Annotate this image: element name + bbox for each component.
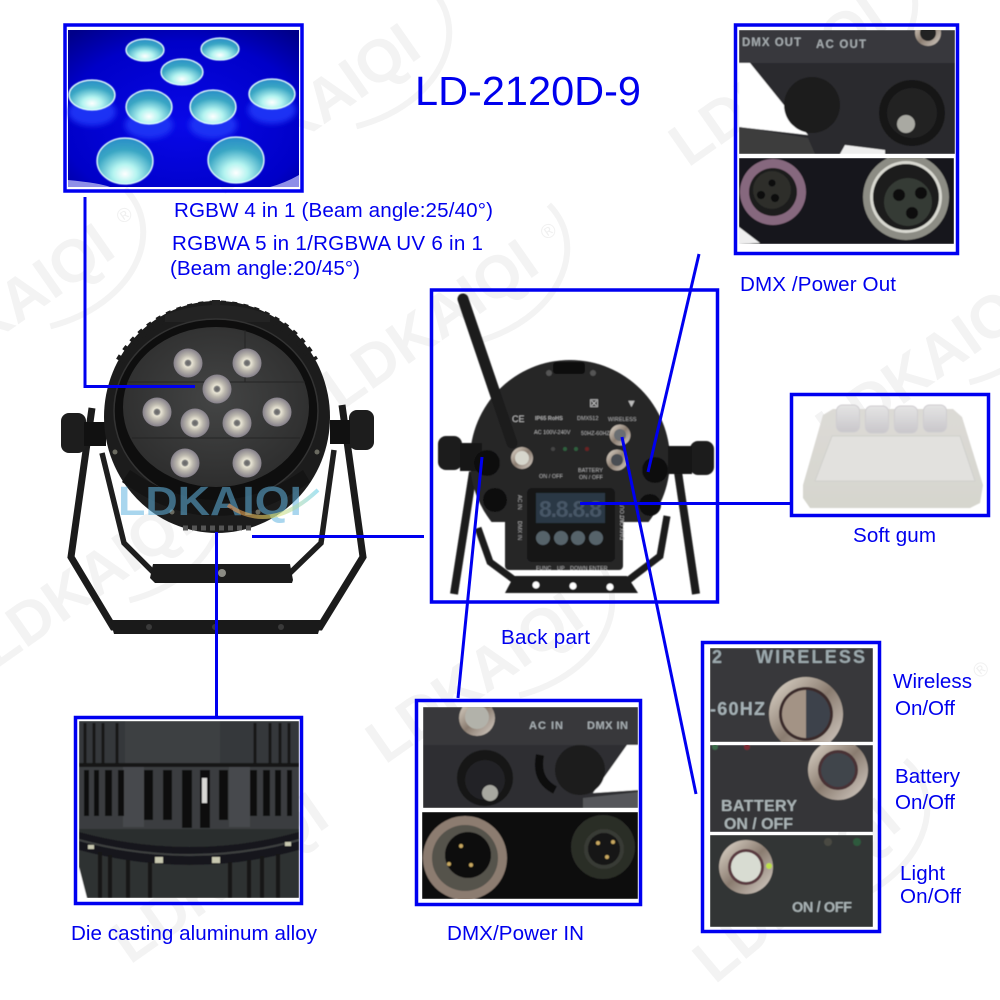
label: battery (895, 765, 961, 814)
label: light: Light (900, 862, 945, 885)
light switch closeup: ON / OFF (792, 900, 852, 916)
wireless switch closeup: -60HZ (710, 699, 765, 719)
photo: DMX and power in (422, 700, 638, 900)
label: light (900, 862, 961, 908)
label: soft gum: Soft gum (853, 524, 936, 547)
die-cast frame (76, 718, 302, 904)
printed panel text: DMX512 (577, 416, 598, 422)
label: DMX power out: DMX /Power Out (740, 273, 896, 296)
wireless switch (610, 424, 630, 446)
wireless switch closeup (710, 647, 873, 751)
cooling fins (120, 305, 314, 361)
printed panel text: ON / OFF (539, 474, 563, 480)
title: LD-2120D-9 (415, 68, 641, 114)
printed panel text: WIRELESS (608, 417, 637, 423)
connector lines (85, 197, 790, 794)
watermark pattern: LDKAIQI (354, 579, 595, 776)
photo: switches (710, 647, 873, 927)
light gap (202, 778, 207, 803)
input ports closeup (423, 700, 638, 808)
left cable gland (474, 450, 500, 476)
battery switch (606, 450, 628, 470)
control panel (527, 488, 615, 562)
indicator LEDs (551, 447, 589, 451)
rear housing (470, 359, 670, 523)
label: wireless (893, 670, 972, 720)
antenna (463, 299, 512, 443)
beam glow (68, 96, 296, 139)
white corner (79, 867, 87, 898)
printed panel text: CE (512, 414, 525, 424)
output ports closeup: DMX OUT (742, 37, 801, 49)
watermark pattern: LDKAIQI (99, 779, 340, 976)
upper slits (85, 723, 289, 763)
photo corners (68, 175, 299, 187)
middle band (79, 767, 299, 829)
rear legs (454, 472, 696, 594)
rear inner bracket (478, 516, 667, 582)
wireless switch closeup: WIRELESS (756, 647, 865, 667)
band seam (79, 763, 299, 767)
output ports closeup: AC OUT (816, 39, 866, 51)
printed panel text: AC OUT (620, 502, 626, 523)
right cable gland (642, 457, 668, 483)
watermark pattern: LDKAIQI (680, 785, 912, 995)
printed panel text: DMX IN (516, 521, 522, 540)
DMX out frame (736, 25, 958, 254)
printed panel text: AC IN (516, 495, 522, 510)
label: die casting: Die casting aluminum alloy (71, 922, 318, 945)
label: DMX power in: DMX/Power IN (447, 922, 584, 945)
photo: die-cast housing (79, 721, 299, 898)
LED spec text: (Beam angle:20/45°) (170, 257, 360, 280)
printed panel text: FUNC (536, 566, 551, 572)
printed panel text: AC 100V-240V (534, 430, 571, 436)
light switch (511, 447, 533, 469)
LED spec text (170, 199, 493, 280)
housing (104, 301, 330, 533)
photo: blue LED beams (68, 30, 299, 187)
printed panel text: ON / OFF (579, 475, 603, 481)
printed panel text: ⊠ (589, 396, 599, 410)
printed panel text: BATTERY (578, 468, 603, 474)
handle clip (546, 362, 596, 376)
label: light: On/Off (900, 885, 961, 908)
label: wireless: On/Off (895, 697, 955, 720)
wireless switch closeup: 2 (712, 647, 722, 667)
watermark pattern: ® (969, 657, 994, 683)
LED spec text: RGBWA 5 in 1/RGBWA UV 6 in 1 (172, 232, 483, 255)
battery switch closeup: BATTERY (721, 798, 797, 815)
LED display: 8.8.8.8 (539, 496, 602, 522)
rear knobs (438, 436, 462, 470)
LED spec text: RGBW 4 in 1 (Beam angle:25/40°) (174, 199, 493, 222)
output ports closeup (739, 20, 955, 154)
logo swoosh (228, 490, 318, 517)
switches frame (702, 642, 880, 932)
back part frame (432, 290, 718, 602)
lower slits (100, 852, 278, 898)
menu buttons (536, 531, 603, 545)
printed panel text: DMX OUT (620, 514, 626, 540)
LEDs (142, 348, 292, 478)
printed panel text: IP65 RoHS (535, 416, 563, 422)
outer yoke bracket (71, 405, 363, 634)
label: battery: Battery (895, 765, 961, 788)
DMX in frame (416, 700, 640, 904)
centre panels (123, 767, 144, 827)
watermark pattern: ® (112, 202, 137, 229)
rivets (88, 842, 291, 863)
rear right knob (690, 441, 714, 475)
photo: soft gum cover (803, 405, 983, 508)
label: wireless: Wireless (893, 670, 972, 693)
battery switch closeup: ON / OFF (724, 816, 793, 833)
gum inner recess (815, 436, 975, 481)
inner yoke bracket (102, 450, 334, 583)
side rivets (112, 450, 320, 514)
lower band (79, 850, 299, 898)
printed panel text (512, 396, 637, 572)
label: back part: Back part (501, 626, 590, 649)
printed panel text: ▼ (626, 398, 637, 410)
lens ring (114, 319, 318, 503)
soft gum frame (792, 394, 988, 516)
face seams (128, 330, 305, 438)
curved ring (79, 832, 299, 865)
input ports closeup: AC IN (529, 720, 563, 732)
photo: DMX and power out (739, 20, 955, 244)
label: battery: On/Off (895, 791, 955, 814)
bottom vents (183, 526, 252, 530)
rear bottom bar (505, 576, 638, 593)
left knob (61, 413, 86, 453)
lower control body (505, 488, 623, 570)
beam photo frame (65, 25, 302, 191)
middle slits (84, 770, 292, 828)
main fixture: front view (61, 300, 374, 634)
knob axles (84, 420, 350, 446)
upper band (125, 721, 220, 763)
printed panel text: 50HZ-60HZ (581, 431, 610, 437)
battery switch closeup (710, 740, 873, 833)
gum keys (836, 405, 946, 433)
lens beams (69, 38, 295, 184)
input ports closeup: DMX IN (587, 720, 628, 732)
lower rim (122, 470, 310, 516)
watermark pattern: ® (536, 218, 561, 245)
cap left (483, 488, 507, 512)
top shoulder (165, 305, 270, 322)
pin plugs closeup (422, 812, 638, 900)
lens face (123, 327, 309, 487)
top tab (212, 300, 220, 308)
pin sockets closeup (739, 154, 954, 244)
cap right (639, 494, 661, 516)
light switch closeup (710, 835, 873, 927)
coloured brand logo: LDKAIQI (118, 478, 302, 524)
knob connectors (460, 443, 692, 474)
printed panel text: UP (557, 566, 565, 572)
watermark pattern: LDKAIQI (191, 10, 432, 207)
rear fixture view (438, 299, 714, 594)
right knob (349, 410, 374, 450)
watermark pattern: LDKAIQI (309, 226, 550, 423)
printed panel text: DOWN ENTER (570, 566, 608, 572)
